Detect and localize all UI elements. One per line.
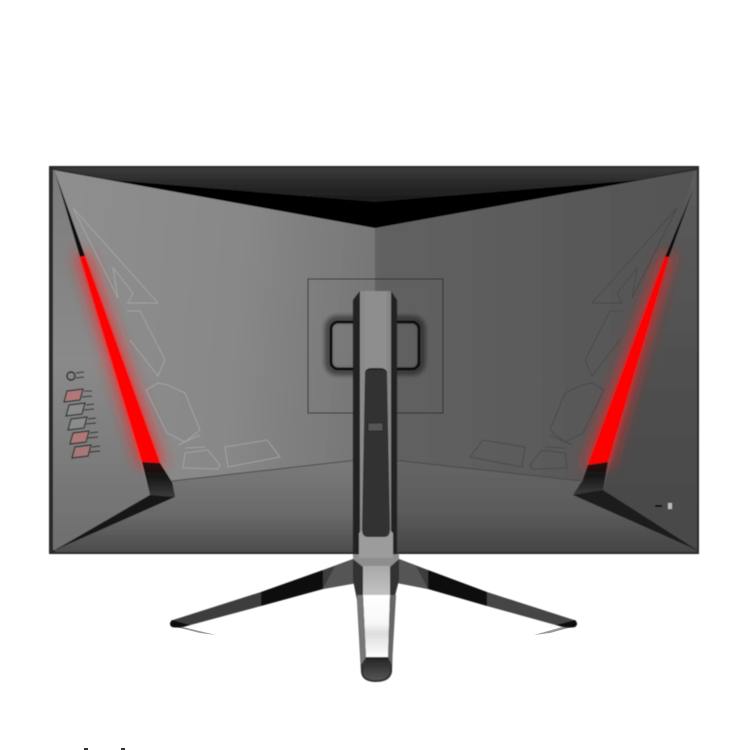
- column face: [365, 291, 387, 372]
- outer frame: [49, 166, 699, 554]
- VESA mount plate: [308, 279, 443, 413]
- monitor back panel: [49, 166, 699, 554]
- left side strip: [53, 170, 150, 550]
- left lower blade: [55, 462, 175, 550]
- right wall: [375, 170, 697, 550]
- inner opening: [362, 370, 390, 537]
- lower silver section: [359, 530, 393, 558]
- bottom edge fragments: [84, 748, 125, 750]
- left red bar: [80, 256, 160, 463]
- right floor: [375, 458, 697, 552]
- carry handle: [331, 322, 419, 369]
- right red glow: [588, 257, 669, 465]
- menu buttons: [64, 389, 100, 458]
- power button: [67, 372, 84, 380]
- right black line: [665, 190, 693, 257]
- silver rails: [360, 291, 391, 554]
- top chevron: [52, 168, 698, 228]
- dark column body: [353, 291, 397, 554]
- left red glow: [80, 256, 160, 463]
- cable clip: [368, 423, 383, 431]
- right etched pattern: [470, 208, 677, 469]
- floor edge line: [172, 458, 582, 481]
- rear ports: [655, 503, 672, 509]
- control buttons: [64, 372, 100, 458]
- handle shadow: [328, 319, 422, 372]
- stand base with legs: [170, 554, 577, 682]
- left floor: [55, 458, 375, 552]
- right leg: [397, 559, 577, 628]
- left etched pattern: [73, 208, 280, 469]
- left black line: [55, 172, 85, 257]
- stand shadows on floor: [176, 627, 572, 635]
- right red bar: [588, 257, 669, 465]
- stand column: [353, 291, 397, 558]
- right lower blade: [573, 462, 697, 550]
- centre foot: [353, 554, 399, 682]
- left leg: [170, 559, 357, 628]
- right side strip: [603, 170, 697, 550]
- left wall: [53, 170, 375, 550]
